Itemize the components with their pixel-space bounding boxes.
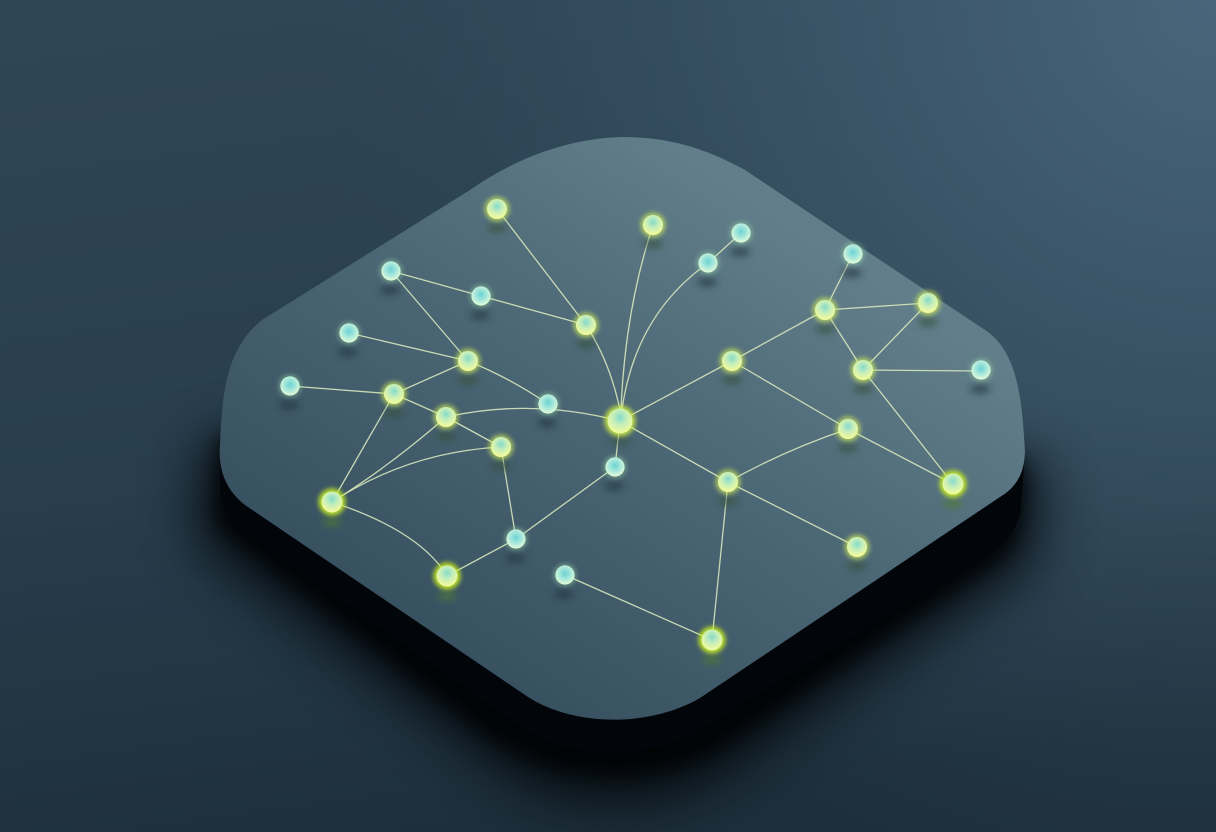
node <box>470 284 492 320</box>
node <box>488 434 514 471</box>
node <box>554 564 576 599</box>
node <box>434 404 458 441</box>
node <box>318 488 346 527</box>
node <box>970 358 992 394</box>
platform side wall and contact shadow <box>216 300 1025 776</box>
platform soft cast shadow <box>195 440 1045 806</box>
node <box>338 322 360 357</box>
node <box>640 212 666 249</box>
node <box>604 456 626 491</box>
platform top surface <box>220 137 1025 720</box>
node <box>836 416 860 453</box>
node <box>434 562 460 601</box>
node <box>730 222 752 257</box>
node <box>720 348 744 385</box>
node <box>844 534 870 571</box>
node <box>278 374 302 410</box>
node <box>382 382 406 418</box>
node <box>850 358 876 394</box>
node <box>716 470 740 506</box>
node <box>484 196 510 233</box>
platform side wall edge <box>220 300 1025 752</box>
node <box>504 528 528 563</box>
network connections <box>290 209 981 640</box>
node <box>380 260 402 295</box>
node <box>536 392 560 428</box>
node <box>456 348 480 385</box>
node <box>698 626 726 665</box>
network nodes <box>278 196 992 665</box>
node <box>940 470 966 509</box>
central hub node <box>604 406 636 446</box>
node <box>574 312 598 349</box>
node <box>696 252 720 287</box>
node <box>842 242 864 278</box>
node <box>916 290 940 327</box>
node <box>812 298 838 334</box>
